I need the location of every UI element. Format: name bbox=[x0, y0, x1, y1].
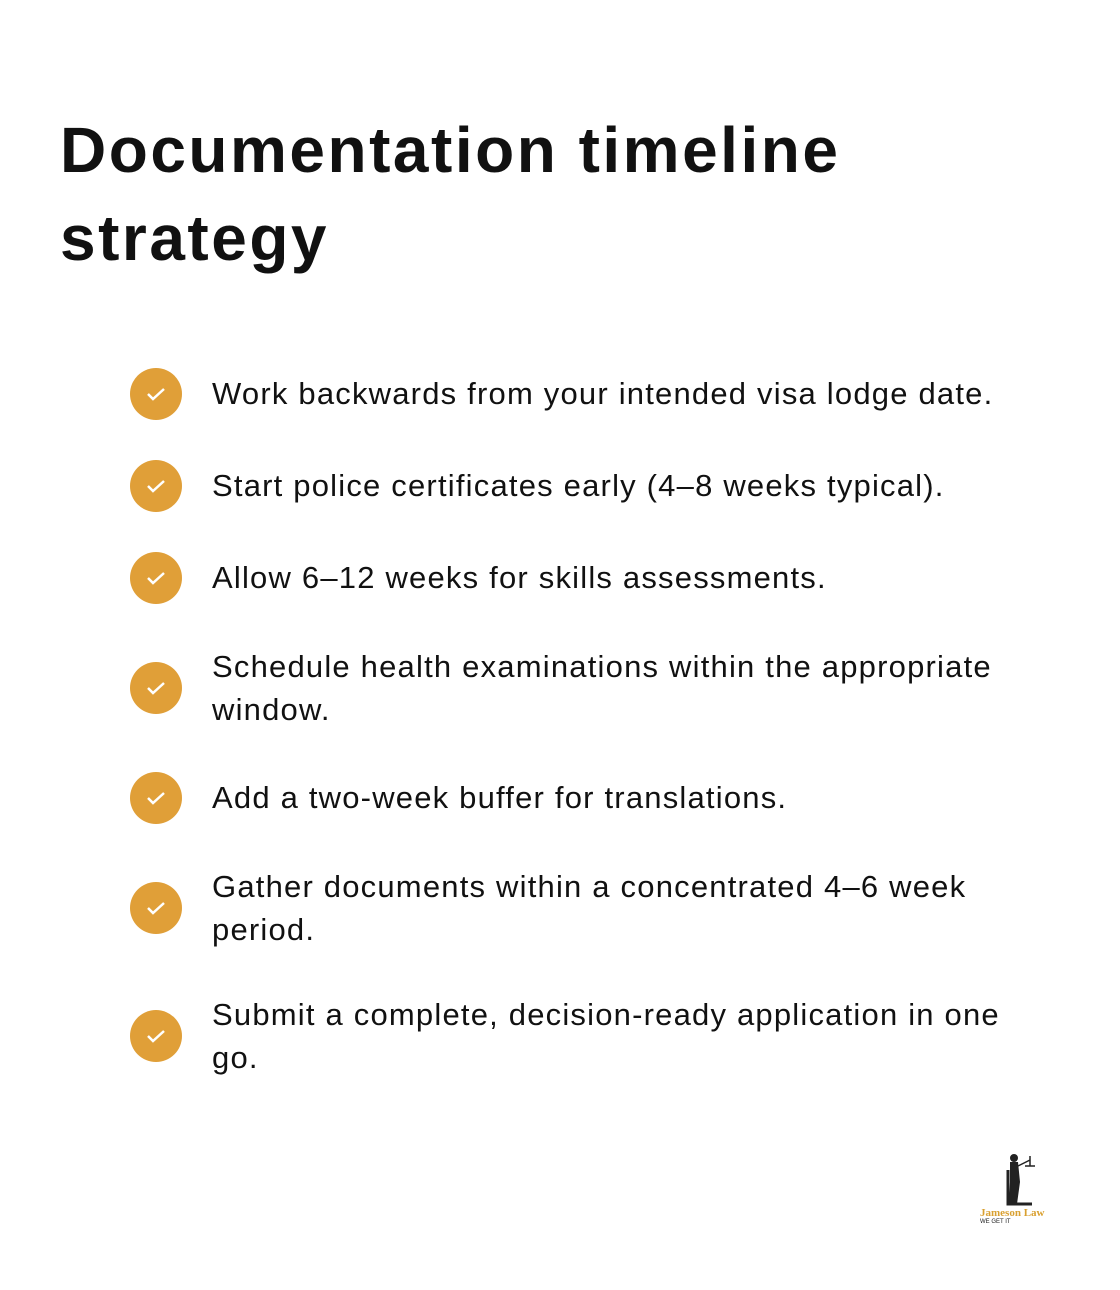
item 4: Schedule health examinations within the appropriate bbox=[212, 649, 992, 684]
logo bbox=[980, 1154, 1044, 1225]
item 6 bbox=[130, 869, 966, 947]
icon: justice figure bbox=[1006, 1154, 1035, 1206]
item 2 bbox=[130, 460, 945, 512]
item 2: Start police certificates early (4–8 weeks typical). bbox=[212, 468, 945, 503]
item 6: period. bbox=[212, 912, 315, 947]
title bbox=[60, 114, 840, 274]
item 7 bbox=[130, 997, 1000, 1075]
title: Documentation timeline bbox=[60, 114, 840, 186]
item 4 bbox=[130, 649, 992, 727]
logo: WE GET IT bbox=[980, 1219, 1011, 1225]
item 3 bbox=[130, 552, 827, 604]
item 3: Allow 6–12 weeks for skills assessments. bbox=[212, 560, 827, 595]
item 5: Add a two-week buffer for translations. bbox=[212, 780, 787, 815]
item 1 bbox=[130, 368, 993, 420]
item 7: Submit a complete, decision-ready application in one bbox=[212, 997, 1000, 1032]
item 7: go. bbox=[212, 1040, 259, 1075]
logo text: Jameson Law bbox=[980, 1207, 1044, 1219]
item 5 bbox=[130, 772, 787, 824]
item 6: Gather documents within a concentrated 4–6 week bbox=[212, 869, 966, 904]
item 1: Work backwards from your intended visa lodge date. bbox=[212, 376, 993, 411]
item 4: window. bbox=[212, 692, 331, 727]
title: strategy bbox=[60, 202, 329, 274]
